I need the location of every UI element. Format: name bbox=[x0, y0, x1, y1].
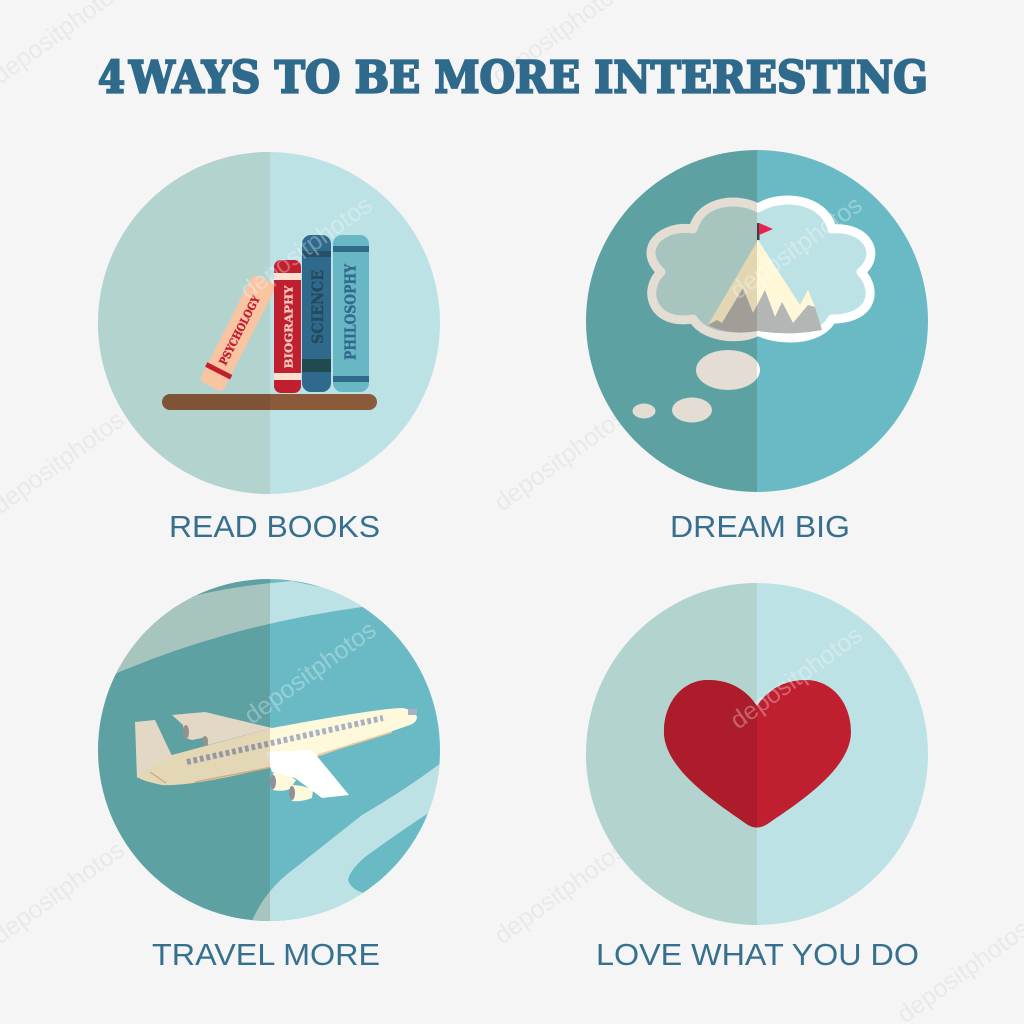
panel: read books bbox=[90, 140, 440, 510]
far engines bbox=[183, 725, 208, 746]
panel: read books: depositphotos bbox=[235, 191, 377, 305]
icon: heart bbox=[664, 680, 851, 828]
panel: love what you do bbox=[586, 583, 928, 925]
label: love what you do: LOVE WHAT YOU DO bbox=[596, 937, 919, 972]
circle background bbox=[98, 579, 440, 921]
icon: philosophy book: PHILOSOPHY bbox=[343, 263, 360, 360]
icon: biography book: BIOGRAPHY bbox=[282, 285, 296, 368]
panel: travel more bbox=[98, 579, 440, 921]
panel: love what you do: depositphotos bbox=[725, 621, 867, 735]
icon: airplane bbox=[135, 708, 417, 801]
title: 4 bbox=[98, 52, 125, 104]
title: WAYS TO BE MORE INTERESTING bbox=[128, 52, 928, 104]
panel: dream big: depositphotos bbox=[725, 191, 867, 305]
icon: psychology book bbox=[198, 273, 278, 393]
far wing bbox=[172, 712, 272, 745]
tail fin bbox=[135, 720, 172, 778]
near wing bbox=[266, 750, 349, 798]
icon: science book: SCIENCE bbox=[308, 270, 327, 344]
belly stripes bbox=[150, 732, 392, 783]
icon: thought bubbles bbox=[632, 350, 760, 422]
icon: flag bbox=[757, 223, 773, 240]
circle background bbox=[586, 583, 928, 925]
cockpit window bbox=[408, 709, 417, 715]
near engines bbox=[270, 773, 313, 801]
text: depositphotos bbox=[489, 403, 631, 517]
window row bbox=[187, 718, 383, 762]
fuselage bbox=[137, 708, 417, 785]
circle background bbox=[90, 140, 440, 510]
panel: dream big bbox=[586, 150, 928, 492]
land masses bbox=[116, 581, 440, 921]
label: dream big: DREAM BIG bbox=[670, 509, 850, 544]
icon: science book bbox=[302, 235, 331, 392]
icon: psychology book: PSYCHOLOGY bbox=[217, 294, 263, 367]
text: depositphotos bbox=[489, 836, 631, 950]
icon: shelf bbox=[162, 394, 377, 410]
icon: thought cloud bbox=[651, 200, 871, 338]
circle background bbox=[586, 150, 928, 492]
icon: mountain bbox=[708, 240, 822, 333]
label: read books: READ BOOKS bbox=[169, 509, 380, 544]
label: travel more: TRAVEL MORE bbox=[152, 937, 380, 972]
panel: travel more: depositphotos bbox=[239, 616, 381, 730]
icon: philosophy book bbox=[333, 235, 369, 392]
icon: biography book bbox=[274, 260, 301, 393]
